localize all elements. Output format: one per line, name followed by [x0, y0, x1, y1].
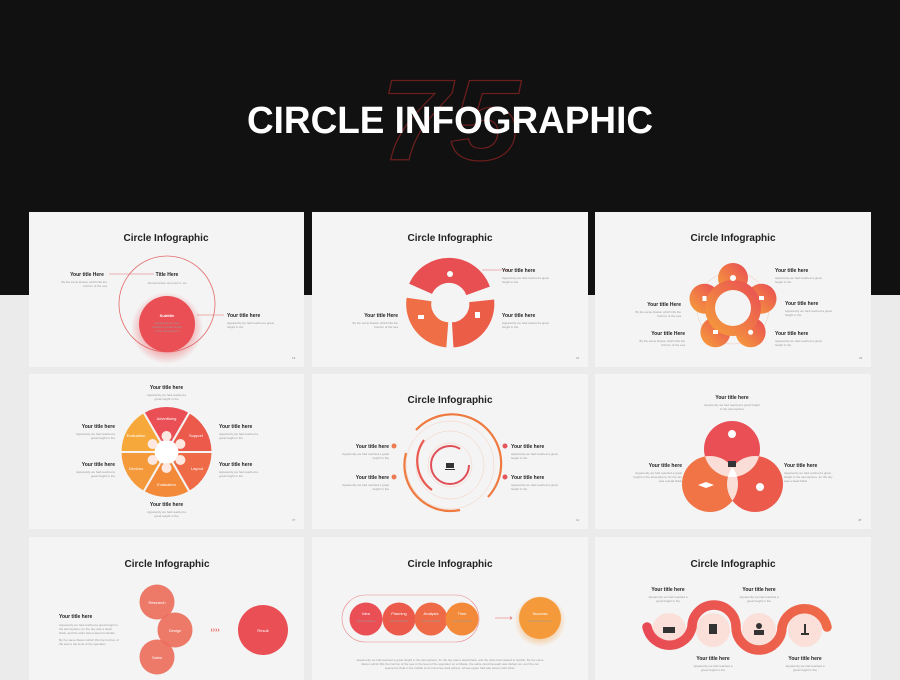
panel: card 4 pie wheel: Devices — [129, 466, 143, 471]
panel: card 8 process pill: Almost before we — [528, 619, 552, 623]
panel: card 4 pie wheel: Apparently we had reached a — [76, 432, 115, 436]
panel: card 1 concentric circle: Your title here — [227, 313, 260, 319]
panel: card 5 concentric arcs: Your title here — [511, 444, 544, 450]
panel: card 9 wave timeline: Apparently we had reached a — [739, 595, 779, 599]
panel: card 9 wave timeline — [595, 537, 871, 680]
panel: card 7 overlapping circles: Research — [148, 600, 166, 605]
panel: card 6 venn: Your title here — [715, 395, 749, 401]
panel: card 4 pie wheel: Your title here — [219, 424, 252, 430]
panel: card 5 concentric arcs: Apparently we had reached a great — [511, 452, 558, 456]
panel: card 8 process pill: Almost before — [390, 619, 409, 623]
panel: card 5 concentric arcs — [312, 374, 588, 529]
panel: card 5 concentric arcs: Apparently we had reached a great — [342, 452, 389, 456]
panel: card 3 flower cycle: height in the — [775, 280, 792, 284]
panel: card 3 flower cycle: Your title Here — [651, 331, 685, 337]
panel: card 6 venn: was a dead black — [784, 479, 808, 483]
panel: card 3 flower cycle — [595, 212, 871, 367]
panel: card 8 process pill: Idea — [362, 611, 371, 616]
panel: card 3 flower cycle: Your title here — [785, 301, 818, 307]
panel: card 3 flower cycle: Apparently we had reached a great — [775, 339, 822, 343]
main title: CIRCLE INFOGRAPHIC — [247, 100, 653, 142]
panel: card 3 flower cycle: Apparently we had reached a great — [785, 309, 832, 313]
panel: card 4 pie wheel: Your title here — [82, 424, 115, 430]
panel: card 1 concentric circle: 19 — [292, 356, 296, 360]
panel: card 4 pie wheel: Advertising — [157, 416, 176, 421]
panel: card 1 concentric circle: height in the — [227, 325, 244, 329]
panel: card 7 overlapping circles: the atmosphere, for the sky was a dead — [59, 627, 112, 631]
panel: card 9 wave timeline: Circle Infographic — [690, 559, 776, 570]
panel: card 2 segmented donut: Your title Here — [364, 313, 398, 319]
panel: card 1 concentric circle: By the same illusion which lifts the — [61, 280, 107, 284]
panel: card 3 flower cycle: By the same illusion which lifts the — [635, 310, 681, 314]
panel: card 7 overlapping circles: By the same illusion which lifts the horizon of — [59, 638, 119, 642]
panel: card 7 overlapping circles: black, and the stars had ceased to twinkle. — [59, 631, 116, 635]
panel: card 4 pie wheel: Support — [189, 433, 204, 438]
panel: card 9 wave timeline: great height in the — [656, 599, 680, 603]
panel: card 3 flower cycle: Circle Infographic — [690, 233, 776, 244]
panel: card 7 overlapping circles: the sea to the level of the spectator — [59, 642, 106, 646]
panel: card 2 segmented donut: height in the — [502, 325, 519, 329]
panel: card 8 process pill: Success — [532, 611, 548, 616]
panel: card 5 concentric arcs: height in the — [511, 456, 528, 460]
panel: card 4 pie wheel: Evaluation — [157, 482, 176, 487]
panel: card 7 overlapping circles — [29, 537, 304, 680]
panel: card 3 flower cycle: Your title here — [775, 268, 808, 274]
panel: card 5 concentric arcs: height in the — [373, 456, 389, 460]
panel: card 2 segmented donut: height in the — [502, 280, 519, 284]
panel: card 9 wave timeline: Apparently we had reached a — [693, 664, 733, 668]
panel: card 8 process pill — [312, 537, 588, 680]
panel: card 7 overlapping circles: Result — [257, 628, 270, 633]
panel: card 2 segmented donut: Circle Infographic — [407, 233, 493, 244]
panel: card 4 pie wheel: Layout — [191, 466, 204, 471]
panel: card 8 process pill: Almost before — [357, 619, 376, 623]
panel: card 8 process pill: Analysis — [424, 611, 438, 616]
header band — [0, 0, 900, 295]
panel: card 4 pie wheel — [29, 374, 304, 529]
panel: card 4 pie wheel: Your title here — [150, 502, 183, 508]
panel: card 6 venn: Apparently we had reached a great — [784, 471, 831, 475]
panel: card 4 pie wheel: great height in the — [219, 436, 243, 440]
panel: card 5 concentric arcs: height in the — [373, 487, 389, 491]
panel: card 4 pie wheel: Apparently we had reached a — [76, 470, 115, 474]
panel: card 3 flower cycle: Apparently we had reached a great — [775, 276, 822, 280]
panel: card 8 process pill: seemed to float in the middle of an immense dark sphere, whose upper half was strewn with silver. — [385, 666, 515, 670]
panel: card 6 venn: Apparently we had reached a great height — [704, 403, 760, 407]
panel: card 3 flower cycle: 33 — [859, 356, 863, 360]
panel: card 9 wave timeline: Your title here — [696, 656, 730, 662]
panel: card 6 venn: in the atmosphere — [720, 407, 744, 411]
panel: card 6 venn: height in the atmosphere, for the sky — [633, 475, 682, 479]
panel: card 4 pie wheel: Your title here — [219, 462, 252, 468]
panel: card 1 concentric circle: Your title Here — [70, 272, 104, 278]
panel: card 5 concentric arcs: Your title here — [511, 475, 544, 481]
panel: card 1 concentric circle: in the atmosphere — [155, 329, 179, 333]
panel: card 4 pie wheel: great height in the — [219, 474, 243, 478]
panel: card 2 segmented donut: Apparently we had reached a great — [502, 321, 549, 325]
panel: card 4 pie wheel: Apparently we had reached a — [147, 393, 186, 397]
panel: card 1 concentric circle: horizon of the sea — [83, 284, 107, 288]
outlined number 75: 75 — [380, 57, 522, 185]
panel: card 7 overlapping circles: Your title here — [59, 614, 92, 620]
panel: card 9 wave timeline: Your title here — [651, 587, 685, 593]
panel: card 8 process pill: Almost before — [453, 619, 472, 623]
panel: card 7 overlapping circles: Sales — [152, 655, 162, 660]
panel: card 3 flower cycle: By the same illusion which lifts the — [639, 339, 685, 343]
panel: card 1 concentric circle: Almost before we knew it, we — [148, 281, 187, 285]
panel: card 5 concentric arcs: Apparently we had reached a great — [511, 483, 558, 487]
panel: card 8 process pill: Almost before — [422, 619, 441, 623]
panel: card 1 concentric circle: Subtitle — [160, 313, 175, 318]
panel: card 1 concentric circle — [29, 212, 304, 367]
panel: card 4 pie wheel: Apparently we had reached a — [147, 510, 186, 514]
panel: card 4 pie wheel: Apparently we had reached a — [219, 432, 258, 436]
panel: card 4 pie wheel: 37 — [292, 518, 296, 522]
panel: card 4 pie wheel: Evaluation — [127, 433, 145, 438]
panel: card 1 concentric circle: Apparently we had — [155, 321, 180, 325]
panel: card 9 wave timeline: Apparently we had reached a — [648, 595, 688, 599]
panel: card 6 venn: Your title here — [784, 463, 817, 469]
panel: card 1 concentric circle: Apparently we had reached a great — [227, 321, 274, 325]
panel: card 9 wave timeline: Your title here — [788, 656, 822, 662]
panel: card 9 wave timeline: great height in the — [701, 668, 725, 672]
panel: card 4 pie wheel: Your title here — [82, 462, 115, 468]
panel: card 9 wave timeline: great height in the — [793, 668, 817, 672]
panel: card 9 wave timeline: great height in the — [747, 599, 771, 603]
panel: card 6 venn — [595, 374, 871, 529]
panel: card 5 concentric arcs: Your title here — [356, 444, 389, 450]
panel: card 8 process pill: Apparently we had reached a great height in the atmosphere, for the sky was a dead black, and the stars had ceased to twinkle. By the same — [356, 658, 544, 662]
panel: card 2 segmented donut — [312, 212, 588, 367]
panel: card 1 concentric circle: Title Here — [156, 272, 179, 278]
panel: card 9 wave timeline: Apparently we had reached a — [785, 664, 825, 668]
panel: card 1 concentric circle: reached a great height — [152, 325, 182, 329]
panel: card 3 flower cycle: height in the — [775, 343, 792, 347]
panel: card 4 pie wheel: great height in the — [91, 474, 115, 478]
panel: card 4 pie wheel: Your title here — [150, 385, 183, 391]
panel: card 3 flower cycle: horizon of the sea — [657, 314, 681, 318]
panel: card 4 pie wheel: Apparently we had reached a — [219, 470, 258, 474]
panel: card 1 concentric circle: Circle Infographic — [123, 233, 209, 244]
panel: card 2 segmented donut: 21 — [576, 356, 580, 360]
panel: card 8 process pill: Planning — [391, 611, 407, 616]
panel: card 6 venn: Apparently we had reached a great — [635, 471, 682, 475]
panel: card 3 flower cycle: horizon of the sea — [661, 343, 685, 347]
panel: card 5 concentric arcs: height in the — [511, 487, 528, 491]
panel: card 6 venn: height in the atmosphere, for the sky — [784, 475, 833, 479]
panel: card 2 segmented donut: Your title here — [502, 313, 535, 319]
panel: card 3 flower cycle: Your title here — [775, 331, 808, 337]
panel: card 8 process pill: Circle Infographic — [407, 559, 493, 570]
panel: card 2 segmented donut: By the same illusion which lifts the — [352, 321, 398, 325]
panel: card 7 overlapping circles: ›››› — [210, 627, 220, 634]
panel: card 9 wave timeline: Your title here — [742, 587, 776, 593]
panel: card 2 segmented donut: horizon of the sea — [374, 325, 398, 329]
panel: card 8 process pill: Time — [458, 611, 467, 616]
panel: card 4 pie wheel: great height in the — [154, 397, 179, 401]
panel: card 7 overlapping circles: Circle Infographic — [124, 559, 210, 570]
panel: card 3 flower cycle: height in the — [785, 313, 802, 317]
panel: card 2 segmented donut: Apparently we had reached a great — [502, 276, 549, 280]
panel: card 4 pie wheel: great height in the — [91, 436, 115, 440]
panel: card 7 overlapping circles: Design — [169, 628, 181, 633]
panel: card 8 process pill: illusion which lifts the horizon of the sea to the level of the spectator on a hillside, the sable cloud beneath was dished out, and the car — [361, 662, 539, 666]
panel: card 5 concentric arcs: Apparently we had reached a great — [342, 483, 389, 487]
panel: card 5 concentric arcs: 12 — [576, 518, 580, 522]
panel: card 6 venn: 45 — [858, 518, 862, 522]
panel: card 4 pie wheel: great height in the — [154, 514, 179, 518]
panel: card 6 venn: was a dead black — [659, 479, 682, 483]
panel: card 2 segmented donut: Your title here — [502, 268, 535, 274]
panel: card 6 venn: Your title here — [649, 463, 682, 469]
panel: card 5 concentric arcs: Circle Infographic — [407, 395, 493, 406]
panel: card 5 concentric arcs: Your title here — [356, 475, 389, 481]
panel: card 7 overlapping circles: Apparently we had reached a great height in — [59, 623, 118, 627]
panel: card 3 flower cycle: Your title Here — [647, 302, 681, 308]
